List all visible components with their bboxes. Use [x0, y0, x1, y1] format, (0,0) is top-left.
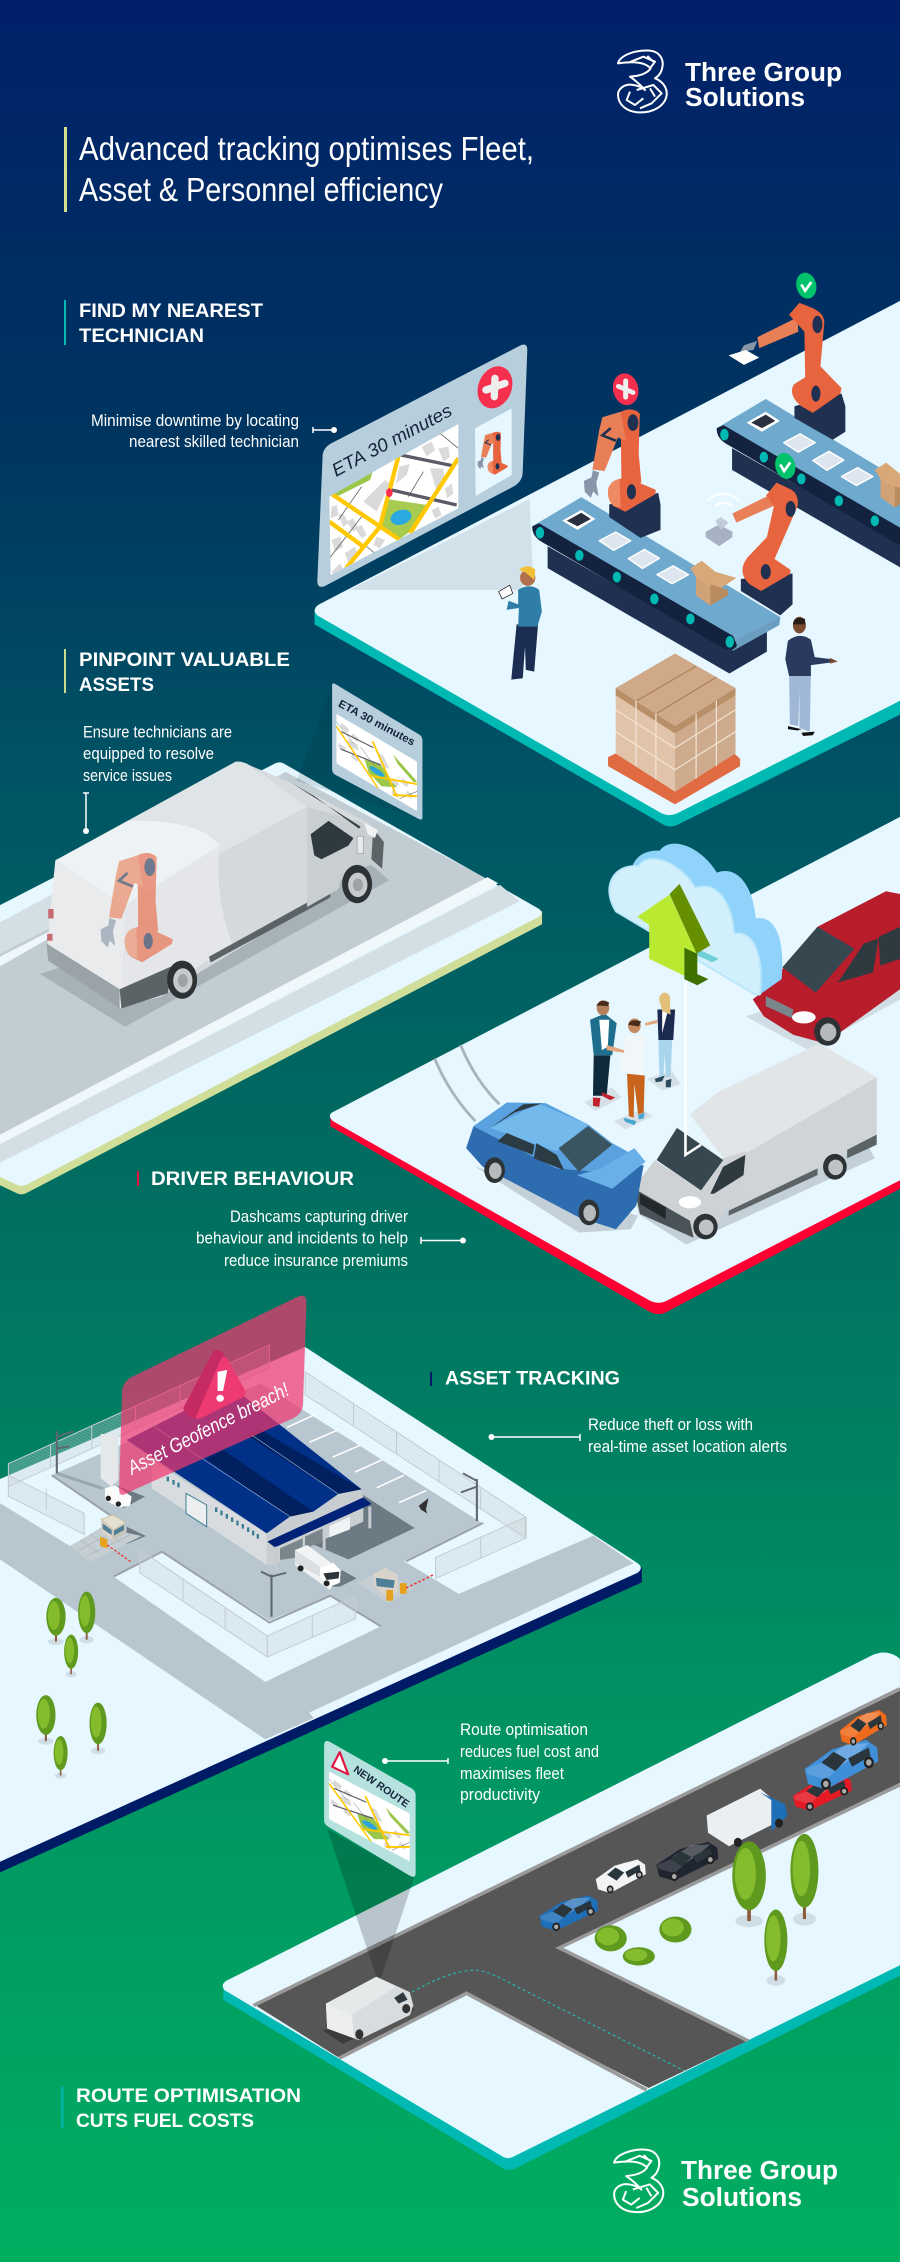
connector: route text to sign	[382, 1758, 448, 1764]
platform surface	[223, 1653, 900, 2158]
logo: Three Group Solutions (bottom)	[614, 2150, 838, 2212]
platform edge	[330, 1116, 900, 1314]
conveyor upper	[717, 399, 900, 575]
platform edge	[0, 1567, 642, 1872]
platform edge	[0, 911, 542, 1194]
heading: pinpoint valuable assets: ASSETS	[79, 674, 154, 696]
skid marks	[435, 1045, 499, 1121]
heading: asset tracking: ASSET TRACKING	[445, 1368, 620, 1390]
geofence alert banner: Asset Geofence breach!	[124, 1379, 293, 1480]
text: dashcams: reduce insurance premiums	[224, 1251, 408, 1270]
logo: Three Group Solutions (bottom): Solutions	[682, 2184, 802, 2212]
title with accent bar	[64, 127, 534, 212]
status icon: fault	[610, 371, 641, 407]
title with accent bar: Advanced tracking optimises Fleet,	[79, 130, 534, 167]
platform edge	[315, 612, 900, 827]
panel: van platform	[0, 761, 542, 1194]
lawn	[114, 1552, 381, 1682]
logo: Three Group Solutions (bottom): Three Group	[681, 2157, 838, 2185]
sign: ETA 30 minutes large: ETA 30 minutes	[328, 400, 455, 481]
heading: pinpoint valuable assets	[64, 649, 290, 696]
sign: small robot arm	[478, 432, 508, 475]
robot arm holding chip	[706, 483, 798, 615]
text: dashcams: Dashcams capturing driver	[230, 1207, 408, 1226]
heading: pinpoint valuable assets: PINPOINT VALUABLE	[79, 649, 290, 671]
text: route optimisation: reduces fuel cost and	[460, 1742, 599, 1761]
heading: find my nearest technician: TECHNICIAN	[79, 325, 204, 347]
conveyor lower	[532, 497, 780, 673]
title with accent bar: Asset & Personnel efficiency	[79, 171, 443, 208]
text: route optimisation	[460, 1720, 599, 1804]
heading: find my nearest technician	[64, 300, 263, 347]
panel: warehouse platform	[0, 1345, 642, 1872]
sign: new route	[324, 1741, 416, 1877]
text: minimise downtime: Minimise downtime by locating	[91, 411, 299, 430]
heading: route optimisation cuts fuel costs: CUTS FUEL COSTS	[76, 2110, 254, 2132]
sign: ETA 30 minutes small: ETA 30 minutes	[336, 698, 417, 749]
platform edge	[223, 1963, 900, 2170]
panel: factory platform	[315, 271, 900, 827]
heading: route optimisation cuts fuel costs	[61, 2085, 301, 2132]
robot arm with fault	[584, 409, 661, 538]
text: ensure technicians: service issues	[83, 766, 172, 785]
heading: route optimisation cuts fuel costs: ROUTE OPTIMISATION	[76, 2085, 301, 2107]
platform surface	[0, 762, 541, 1186]
text: ensure technicians: Ensure technicians are	[83, 722, 232, 742]
heading: driver behaviour: DRIVER BEHAVIOUR	[151, 1168, 354, 1190]
sign: ETA 30 minutes small	[296, 683, 422, 820]
pallet of boxes	[608, 653, 740, 804]
sign: new route: NEW ROUTE	[351, 1764, 411, 1810]
group of people	[584, 993, 681, 1130]
white van	[634, 1043, 877, 1244]
road kerbs	[254, 1689, 900, 2090]
text: reduce theft	[588, 1415, 787, 1456]
worker with tablet	[499, 566, 542, 680]
text: route optimisation: productivity	[460, 1785, 540, 1804]
status icon: ok	[773, 451, 798, 481]
heading: find my nearest technician: FIND MY NEAREST	[79, 300, 263, 322]
traffic queue	[539, 1710, 887, 1931]
site roads	[0, 1383, 633, 1739]
text: dashcams	[196, 1207, 408, 1270]
status icon: ok	[794, 271, 819, 300]
text: route optimisation: Route optimisation	[460, 1720, 588, 1739]
planned route	[412, 1970, 684, 2071]
platform surface	[0, 1347, 641, 1862]
parking bays	[287, 1415, 426, 1503]
kerbs	[52, 1475, 483, 1626]
gatehouse left	[70, 1515, 146, 1562]
panel: crash platform	[330, 817, 900, 1314]
text: minimise downtime	[91, 411, 299, 451]
van	[40, 761, 389, 1027]
red car	[745, 891, 900, 1050]
trees	[36, 1592, 107, 1779]
platform surface	[315, 301, 900, 815]
trees and bushes	[595, 1834, 818, 1986]
connector: technician text to sign	[313, 427, 337, 433]
platform surface	[330, 817, 900, 1303]
truck at dock	[295, 1545, 357, 1590]
person in yard	[419, 1498, 428, 1513]
technician gesturing	[785, 617, 838, 736]
connector: assets text to van	[83, 793, 89, 834]
connector: asset text to site	[488, 1434, 580, 1441]
road	[0, 772, 520, 1163]
text: route optimisation: maximises fleet	[460, 1764, 564, 1783]
light poles	[57, 1431, 477, 1617]
text: ensure technicians	[83, 722, 232, 785]
white van on route	[323, 1977, 414, 2044]
cloud with upload arrow	[609, 844, 782, 995]
road	[256, 1691, 900, 2088]
warehouse building	[101, 1387, 372, 1590]
sign: ETA 30 minutes large	[317, 345, 527, 587]
robot arm decal	[101, 853, 173, 962]
locator pointer	[685, 983, 701, 1155]
logo: Three Group Solutions (top)	[618, 50, 842, 112]
text: ensure technicians: equipped to resolve	[83, 744, 214, 763]
projection cone	[327, 1829, 414, 1979]
text: dashcams: behaviour and incidents to help	[196, 1228, 408, 1248]
text: minimise downtime: nearest skilled technician	[129, 432, 299, 451]
geofence alert banner	[119, 1296, 306, 1495]
panel: route platform	[223, 1653, 900, 2170]
gatehouse right	[358, 1568, 434, 1603]
text: reduce theft: real-time asset location alerts	[588, 1437, 787, 1456]
truck at back	[101, 1434, 145, 1508]
fences	[8, 1345, 526, 1657]
text: reduce theft: Reduce theft or loss with	[588, 1415, 753, 1434]
logo: Three Group Solutions (top): Solutions	[685, 84, 805, 112]
connector: dashcams text to crash	[421, 1237, 466, 1244]
blue crashed car	[466, 1103, 646, 1233]
building shadow	[303, 1494, 415, 1559]
logo: Three Group Solutions (top): Three Group	[685, 59, 842, 87]
projection cone	[350, 499, 533, 590]
truck pole shadow	[57, 1473, 103, 1489]
robot arm placing sheet	[729, 303, 845, 440]
